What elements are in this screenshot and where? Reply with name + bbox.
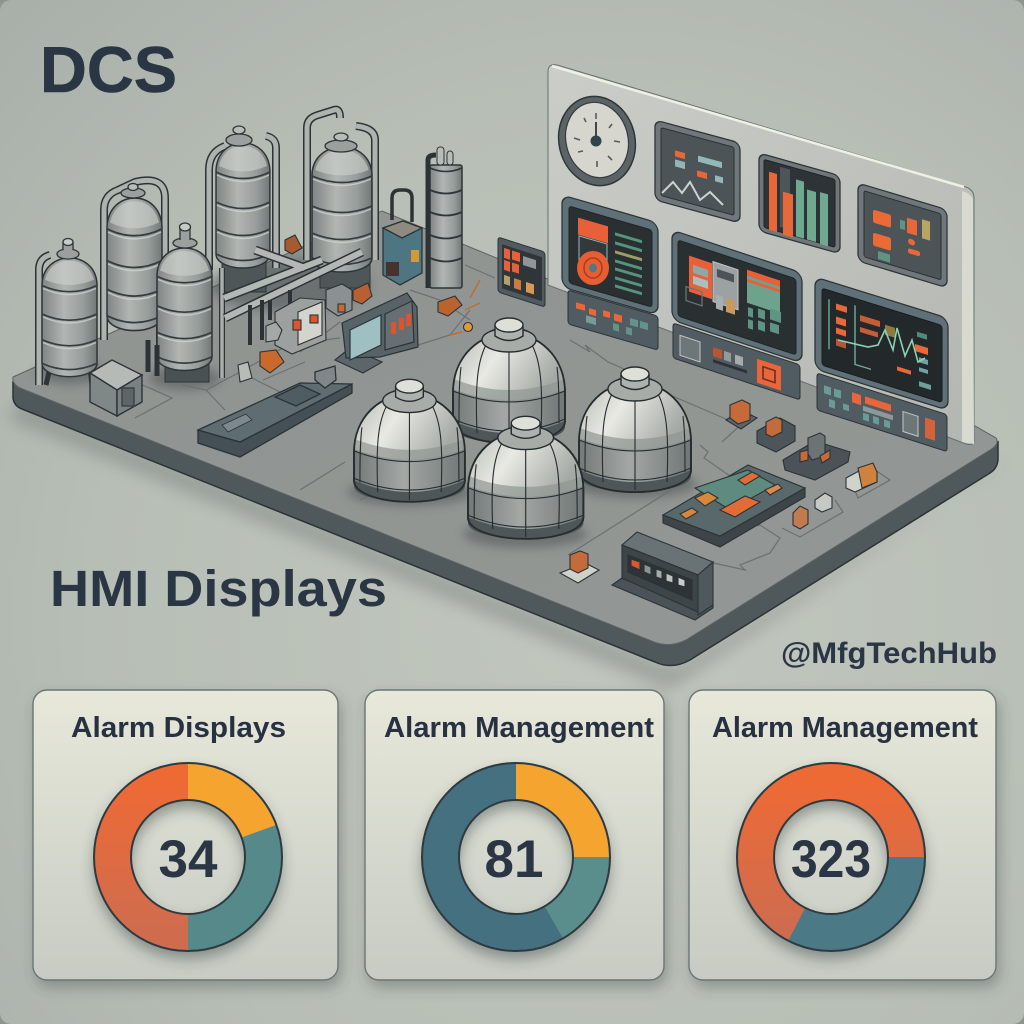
long control bench (198, 366, 352, 457)
floor circuit traces (135, 265, 890, 570)
handle: @MfgTechHub (781, 637, 997, 670)
cube utility box (90, 360, 142, 416)
cross pipes (148, 250, 362, 378)
bottom console box (612, 532, 713, 620)
circuit tablet (663, 465, 805, 547)
screen: status blocks (858, 183, 947, 288)
instrument 2 (757, 417, 795, 452)
instrument 3 (783, 433, 850, 480)
gauge (549, 88, 645, 194)
tank 1 (42, 238, 97, 385)
dome C (579, 367, 691, 492)
card: Alarm Management 323 (689, 690, 996, 980)
instrument 1 (726, 400, 757, 429)
tank 6 thin column (428, 147, 462, 288)
control desk monitor (335, 293, 418, 373)
pipes behind tanks (39, 110, 375, 385)
value: 81 (485, 830, 543, 889)
tank 4 (216, 126, 270, 292)
tall storage tanks with pipes (39, 110, 480, 457)
screen: small side panel (498, 237, 545, 307)
donut chart (737, 763, 925, 951)
screen: right large (815, 277, 948, 452)
subtitle: HMI Displays: HMI Displays (50, 560, 387, 617)
instrument 5 (793, 493, 832, 529)
dome B (453, 318, 565, 443)
donut chart (94, 763, 282, 951)
card title: Alarm Management (712, 712, 978, 744)
screen: center large (672, 230, 802, 400)
instrument 4 (846, 463, 877, 492)
dome D (468, 416, 583, 539)
screen: left large (562, 195, 658, 350)
card title: Alarm Displays (71, 712, 286, 744)
small instruments on platform (560, 400, 877, 620)
card: Alarm Management 81 (365, 690, 664, 980)
donut chart (422, 763, 610, 951)
dome A (354, 379, 465, 502)
tank shadows (36, 259, 697, 548)
isometric plant scene (10, 65, 1005, 690)
card title: Alarm Management (384, 712, 654, 744)
orange valve on plate (560, 551, 599, 583)
title: DCS: DCS (40, 33, 177, 106)
screen: small trend (655, 120, 740, 223)
value: 323 (791, 830, 871, 889)
teal cabinet (383, 190, 422, 285)
card: Alarm Displays 34 (33, 690, 338, 980)
tank 2 (107, 184, 162, 331)
screen: bar chart (759, 153, 840, 254)
platform (10, 211, 1005, 690)
tank 5 (312, 133, 372, 288)
spherical storage domes (354, 318, 691, 539)
tank 3 (157, 223, 212, 382)
wall with mounted displays (498, 65, 974, 452)
machinery cluster (238, 235, 480, 382)
value: 34 (159, 830, 218, 889)
